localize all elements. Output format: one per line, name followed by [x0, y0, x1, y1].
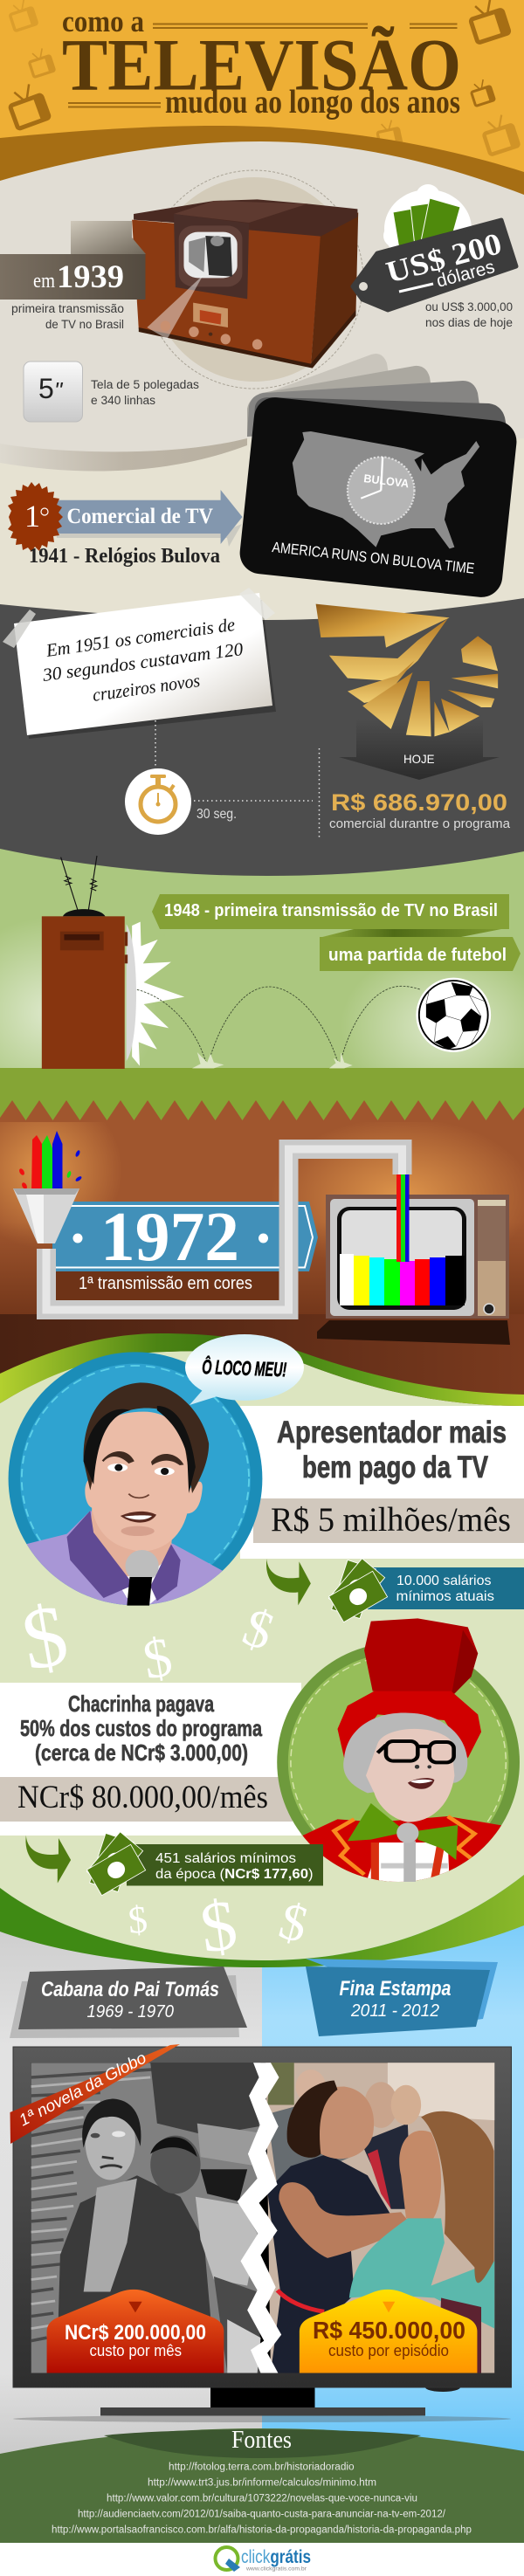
radio-era television from behind — [42, 856, 184, 1069]
logo word: clickgrátis — [241, 2547, 311, 2567]
antenna coils — [65, 876, 97, 891]
tube — [337, 1207, 466, 1310]
color bars — [340, 1254, 465, 1305]
stand shadow — [13, 2415, 511, 2422]
value: NCr$ 80.000,00/mês: NCr$ 80.000,00/mês — [17, 1780, 268, 1815]
cabinet — [326, 1195, 509, 1319]
hat brim — [337, 1691, 481, 1758]
caption: ou US$ 3.000,00 — [425, 300, 513, 329]
tag pointer left — [128, 2302, 142, 2312]
bar: 451 salários — [127, 1844, 323, 1886]
background: novelas right side — [262, 1869, 524, 2462]
arrow: green to old salary — [25, 1836, 71, 1884]
sign body — [52, 1202, 318, 1271]
tag text: NCr$ 200.000,00 — [65, 2321, 206, 2359]
title block — [62, 4, 461, 121]
teal dress — [349, 2218, 494, 2329]
bar: 10.000 salários: mínimos atuais — [396, 1589, 494, 1604]
banner body — [0, 254, 145, 300]
sign: 1972 — [52, 1199, 318, 1300]
background: brown section — [0, 1100, 524, 1319]
bubble body — [185, 1334, 304, 1401]
white footer — [0, 2543, 524, 2576]
caption: tela de 5 polegadas: Tela de 5 polegadas — [91, 378, 199, 391]
icon: stopwatch — [125, 768, 191, 835]
tag pointer right — [383, 2302, 395, 2312]
key: 5 inch — [24, 362, 82, 422]
dollar signs: $ — [127, 1898, 149, 1942]
woman head — [150, 2136, 201, 2194]
tag: custo por mês — [47, 2290, 224, 2373]
logo mark — [215, 2547, 238, 2570]
background: green field — [0, 838, 524, 1074]
price tag: US$ 200 — [353, 184, 516, 310]
ribbon: Fina Estampa: Fina Estampa — [339, 1977, 451, 2001]
man head — [86, 2117, 135, 2180]
caption: ou US$ 3.000,00: nos dias de hoje — [425, 316, 513, 329]
arrow: green to salary — [266, 1559, 311, 1605]
television 1939 illustration — [132, 170, 363, 389]
sources list: http://www.portalsaofrancisco.com.br/alfa/historia-da-propaganda/historia-da-propaganda.php — [52, 2525, 472, 2536]
banknotes — [393, 198, 460, 275]
ribbon top — [152, 894, 509, 929]
logo url: www.clickgratis.com.br — [245, 2566, 307, 2573]
grass zigzag edge — [0, 1100, 524, 1122]
sign outline — [56, 1206, 313, 1268]
RGB streams — [31, 1135, 42, 1193]
icon: banknotes — [86, 1832, 146, 1896]
year: 1972 — [100, 1199, 239, 1276]
brows — [102, 1451, 183, 1465]
bar: 451 salários: 451 salários mínimos — [155, 1851, 296, 1866]
icons: small televisions in header — [5, 0, 519, 155]
background: yellow header — [0, 0, 524, 203]
shirt — [20, 1511, 227, 1607]
color pouring into funnel — [18, 1131, 82, 1193]
paper — [14, 593, 272, 735]
ribbon face — [306, 1966, 490, 2036]
green bottom swoosh — [0, 1875, 524, 1967]
brown glow left — [0, 1092, 122, 1249]
lapels — [334, 1816, 474, 1875]
logo: clickgrátis — [215, 2547, 311, 2573]
arrow body — [57, 490, 243, 544]
caption: 1941 - Relógios Bulova: 1941 - Relógios Bulova — [29, 545, 220, 568]
RGB stream — [396, 1174, 409, 1262]
backdrop circle — [152, 177, 356, 382]
man coat — [58, 2175, 211, 2318]
tape left — [3, 610, 36, 648]
TV body — [132, 199, 358, 368]
bubble text: Ô LOCO MEU! — [202, 1354, 287, 1381]
flat-screen television — [13, 2047, 512, 2422]
curly hair — [343, 1713, 467, 1793]
ordinal 1º: 1 — [24, 499, 40, 534]
arrow: hoje — [339, 719, 500, 780]
mouth — [121, 1512, 156, 1523]
stand neck — [210, 2387, 314, 2407]
control panel — [478, 1261, 506, 1316]
beige band: salary — [253, 1498, 524, 1543]
undershirt — [122, 1548, 174, 1604]
woman dress — [267, 2154, 391, 2373]
ribbon shadow — [306, 1959, 498, 2022]
banner: em 1939 — [0, 221, 146, 300]
background people — [295, 2070, 325, 2097]
handwritten text — [41, 614, 245, 706]
background: cream lower section — [0, 438, 524, 629]
screen edge — [127, 924, 136, 1061]
decorative swoosh — [0, 438, 247, 472]
ribbon: Fina Estampa — [306, 1959, 498, 2036]
caption: tela de 5 polegadas — [91, 378, 199, 407]
pipe — [46, 1149, 402, 1310]
logo: Fantástico — [316, 604, 498, 736]
dotted connectors — [155, 720, 320, 840]
microphone — [125, 1550, 159, 1582]
nose — [415, 1765, 419, 1769]
tag text: R$ 450.000,00: custo por episódio — [328, 2342, 449, 2359]
portrait: Faustão — [9, 1352, 262, 1607]
tag unit: dólares — [434, 257, 497, 292]
key: 5 inch: 5 — [38, 373, 54, 404]
woman head — [320, 2087, 374, 2159]
tag text: R$ 450.000,00 — [313, 2317, 465, 2359]
man shirt — [84, 2179, 137, 2292]
handwritten text: Em 1951 os comerciais de — [44, 614, 237, 661]
thatch — [150, 2063, 260, 2136]
background: dark gray section — [0, 598, 524, 876]
portrait: Chacrinha — [277, 1618, 520, 1884]
speech bubble — [185, 1334, 304, 1405]
flash burst — [132, 922, 184, 1066]
tag bar — [399, 284, 433, 292]
text: Chacrinha pagava — [20, 1691, 262, 1766]
sources list: http://fotolog.terra.com.br/historiadoradio — [169, 2462, 355, 2473]
arrow: hoje: HOJE — [403, 752, 435, 766]
ribbon: 1ª novela da Globo: 1ª novela da Globo — [17, 2049, 149, 2130]
caption: 1ª transmissão em cores — [79, 1274, 252, 1293]
log wall — [31, 2068, 152, 2342]
Bulova commercial card — [238, 354, 519, 599]
hat crown — [364, 1618, 478, 1697]
frame — [13, 2047, 512, 2387]
nose — [128, 1494, 149, 1498]
money cloud — [383, 184, 472, 268]
ribbon shadow — [10, 1975, 239, 2038]
sign dots — [73, 1233, 82, 1243]
tape right — [239, 588, 275, 620]
dollar signs — [15, 1586, 314, 1968]
caption: tela de 5 polegadas: e 340 linhas — [91, 394, 155, 407]
note: 1951 commercials — [3, 588, 276, 739]
tag text: R$ 450.000,00: R$ 450.000,00 — [313, 2317, 465, 2344]
white band: apresentador — [240, 1406, 524, 1559]
tag value: US$ 200 — [383, 226, 505, 290]
background: novelas left side — [0, 1869, 262, 2462]
ribbon: Cabana do Pai Tomás — [10, 1966, 247, 2038]
caption box — [52, 1271, 281, 1300]
grass ground — [0, 1068, 524, 1120]
mouth — [408, 1778, 434, 1789]
green top swoosh — [0, 1333, 524, 1406]
caption: 30 seg.: 30 seg. — [196, 807, 237, 822]
bezel — [330, 1199, 474, 1316]
caption: primeira transmissão: primeira transmissão — [11, 302, 124, 315]
glasses — [377, 1741, 454, 1762]
key: 5 inch: " — [54, 377, 64, 403]
side panel wood — [478, 1200, 506, 1261]
text: Chacrinha pagava: (cerca de NCr$ 3.000,00) — [35, 1739, 248, 1766]
sources list: http://audienciaetv.com/2012/01/saiba-quanto-custa-para-anunciar-na-tv-em-2012/ — [78, 2509, 446, 2519]
value: R$ 686.970,00: R$ 686.970,00 — [331, 789, 507, 816]
caption: comercial durante o programa: comercial durantre o programa — [329, 816, 511, 831]
caption: primeira transmissão — [11, 302, 124, 331]
portrait disk — [9, 1352, 262, 1605]
power light — [425, 2383, 460, 2392]
antennas — [61, 856, 97, 910]
woman dress — [196, 2197, 258, 2285]
jacket — [294, 1816, 508, 1884]
footer lens — [104, 2429, 421, 2458]
sources list: http://www.trt3.jus.br/informe/calculos/minimo.htm — [148, 2478, 376, 2489]
speaker panel — [60, 932, 104, 950]
ribbon: 1948 primeira transmissão: 1948 - primeira transmissão de TV no Brasil — [164, 901, 498, 920]
clock brand: BULOVA — [363, 472, 410, 490]
caption: ou US$ 3.000,00: ou US$ 3.000,00 — [425, 300, 513, 313]
text: Chacrinha pagava: 50% dos custos do programa — [20, 1715, 262, 1741]
note shadow — [21, 600, 276, 739]
heading: apresentador mais bem pago — [277, 1415, 507, 1484]
ribbon: uma partida de futebol — [320, 937, 521, 971]
arrow: 1º comercial de TV — [8, 482, 243, 552]
dollar signs: $ — [196, 1884, 242, 1968]
photo: Cabana do Pai Tomás — [31, 2063, 262, 2373]
bar: 10.000 salários: 10.000 salários — [396, 1574, 491, 1588]
map of USA — [293, 431, 479, 548]
brown glow right — [271, 1118, 524, 1275]
ribbon: Cabana do Pai Tomás: Cabana do Pai Tomás — [41, 1978, 219, 2001]
grabbing hands — [399, 2131, 441, 2221]
face — [85, 1412, 203, 1552]
dollar signs: $ — [236, 1597, 281, 1662]
black card — [238, 396, 519, 599]
knobs — [125, 932, 128, 946]
handwritten text: 30 segundos custavam 120 — [41, 638, 245, 685]
ribbon fold — [322, 929, 501, 937]
shirt — [366, 1842, 450, 1884]
starburst badge — [8, 482, 63, 552]
ribbon: Cabana do Pai Tomás: 1969 - 1970 — [87, 2002, 174, 2022]
value: R$ 5 milhões/mês: R$ 5 milhões/mês — [271, 1501, 511, 1539]
background: beige section — [0, 141, 524, 629]
photos on screen — [31, 2063, 494, 2373]
long hair — [421, 2111, 494, 2283]
stand base — [100, 2407, 425, 2415]
dashed ring — [145, 170, 363, 389]
title rules — [68, 24, 458, 107]
field glow right — [341, 947, 524, 1105]
face — [366, 1729, 454, 1822]
heading: Fontes: Fontes — [231, 2426, 292, 2454]
cabinet — [42, 916, 125, 1069]
bar: 451 salários: da época (NCr$ 177,60 ) — [155, 1867, 314, 1882]
suspenders — [375, 1842, 441, 1884]
screen black — [31, 2063, 494, 2373]
ribbon: 1948 primeira transmissão — [152, 894, 509, 937]
title line: mudou ao longo dos anos: mudou ao longo dos anos — [165, 84, 460, 121]
label em: em — [33, 270, 55, 293]
funnel — [13, 1188, 79, 1243]
neck — [90, 1508, 174, 1577]
title line: como a: como a — [62, 4, 144, 38]
sources list — [52, 2462, 472, 2536]
dollar signs: $ — [273, 1891, 314, 1953]
dollar signs: $ — [138, 1625, 176, 1691]
zigzag tear — [238, 2063, 281, 2373]
sources list: http://www.valor.com.br/cultura/1073222/novelas-que-voce-nunca-viu — [107, 2493, 417, 2504]
banner fold — [71, 221, 146, 254]
background: brown curved band — [0, 126, 524, 203]
antenna base — [63, 909, 106, 916]
brown wall shade — [0, 1223, 524, 1315]
background: pale green section — [0, 1351, 524, 1960]
field glow left — [0, 917, 157, 1109]
woman arm — [279, 2182, 411, 2258]
dollar signs: $ — [15, 1586, 74, 1689]
beige band: Chacrinha pay — [0, 1777, 293, 1822]
caption: primeira transmissão: de TV no Brasil — [45, 318, 124, 331]
tag text: NCr$ 200.000,00: custo por mês — [89, 2342, 182, 2359]
ribbon: 1ª novela da Globo — [10, 2044, 180, 2144]
tag text: NCr$ 200.000,00: NCr$ 200.000,00 — [65, 2321, 206, 2345]
arrow shadow — [57, 524, 242, 547]
ordinal mark — [41, 508, 48, 515]
color television 1972 — [317, 1174, 510, 1345]
side panel tag — [478, 1200, 506, 1206]
soccer ball — [416, 978, 491, 1052]
title line: TELEVISÃO: TELEVISÃO — [62, 24, 461, 107]
year 1939: 1939 — [57, 259, 124, 295]
handwritten text: cruzeiros novos — [91, 670, 201, 706]
ribbon: Fina Estampa: 2011 - 2012 — [350, 2001, 439, 2021]
bow tie — [348, 1803, 399, 1841]
collars — [67, 1511, 134, 1598]
icon: banknotes — [328, 1559, 388, 1622]
photo: Fina Estampa — [265, 2063, 494, 2373]
ribbon face — [18, 1966, 247, 2029]
control knob — [484, 1304, 494, 1314]
text: Chacrinha pagava: Chacrinha pagava — [68, 1691, 214, 1717]
droplets — [18, 1150, 82, 1190]
footer green panel — [0, 2428, 524, 2543]
tag shape — [353, 220, 516, 310]
fanned cards — [247, 354, 508, 437]
hair — [84, 1382, 209, 1493]
grass tufts — [192, 1052, 224, 1068]
bubble tail — [190, 1384, 220, 1405]
label: Comercial de TV — [66, 505, 213, 528]
tag: custo por episódio — [300, 2290, 477, 2373]
ribbon: uma partida de futebol: uma partida de futebol — [328, 946, 507, 965]
card slogan: AMERICA RUNS ON BULOVA TIME — [272, 539, 475, 577]
microphone — [403, 1841, 416, 1882]
wood floor — [0, 1314, 524, 1415]
table — [317, 1320, 510, 1345]
belt — [278, 2290, 324, 2311]
bar: 10.000 salários — [368, 1567, 524, 1609]
eyes — [107, 1464, 128, 1471]
tag hole — [359, 282, 368, 291]
bouncing ball path — [137, 986, 421, 1068]
disk — [277, 1643, 520, 1882]
white band: Chacrinha — [0, 1683, 301, 1836]
